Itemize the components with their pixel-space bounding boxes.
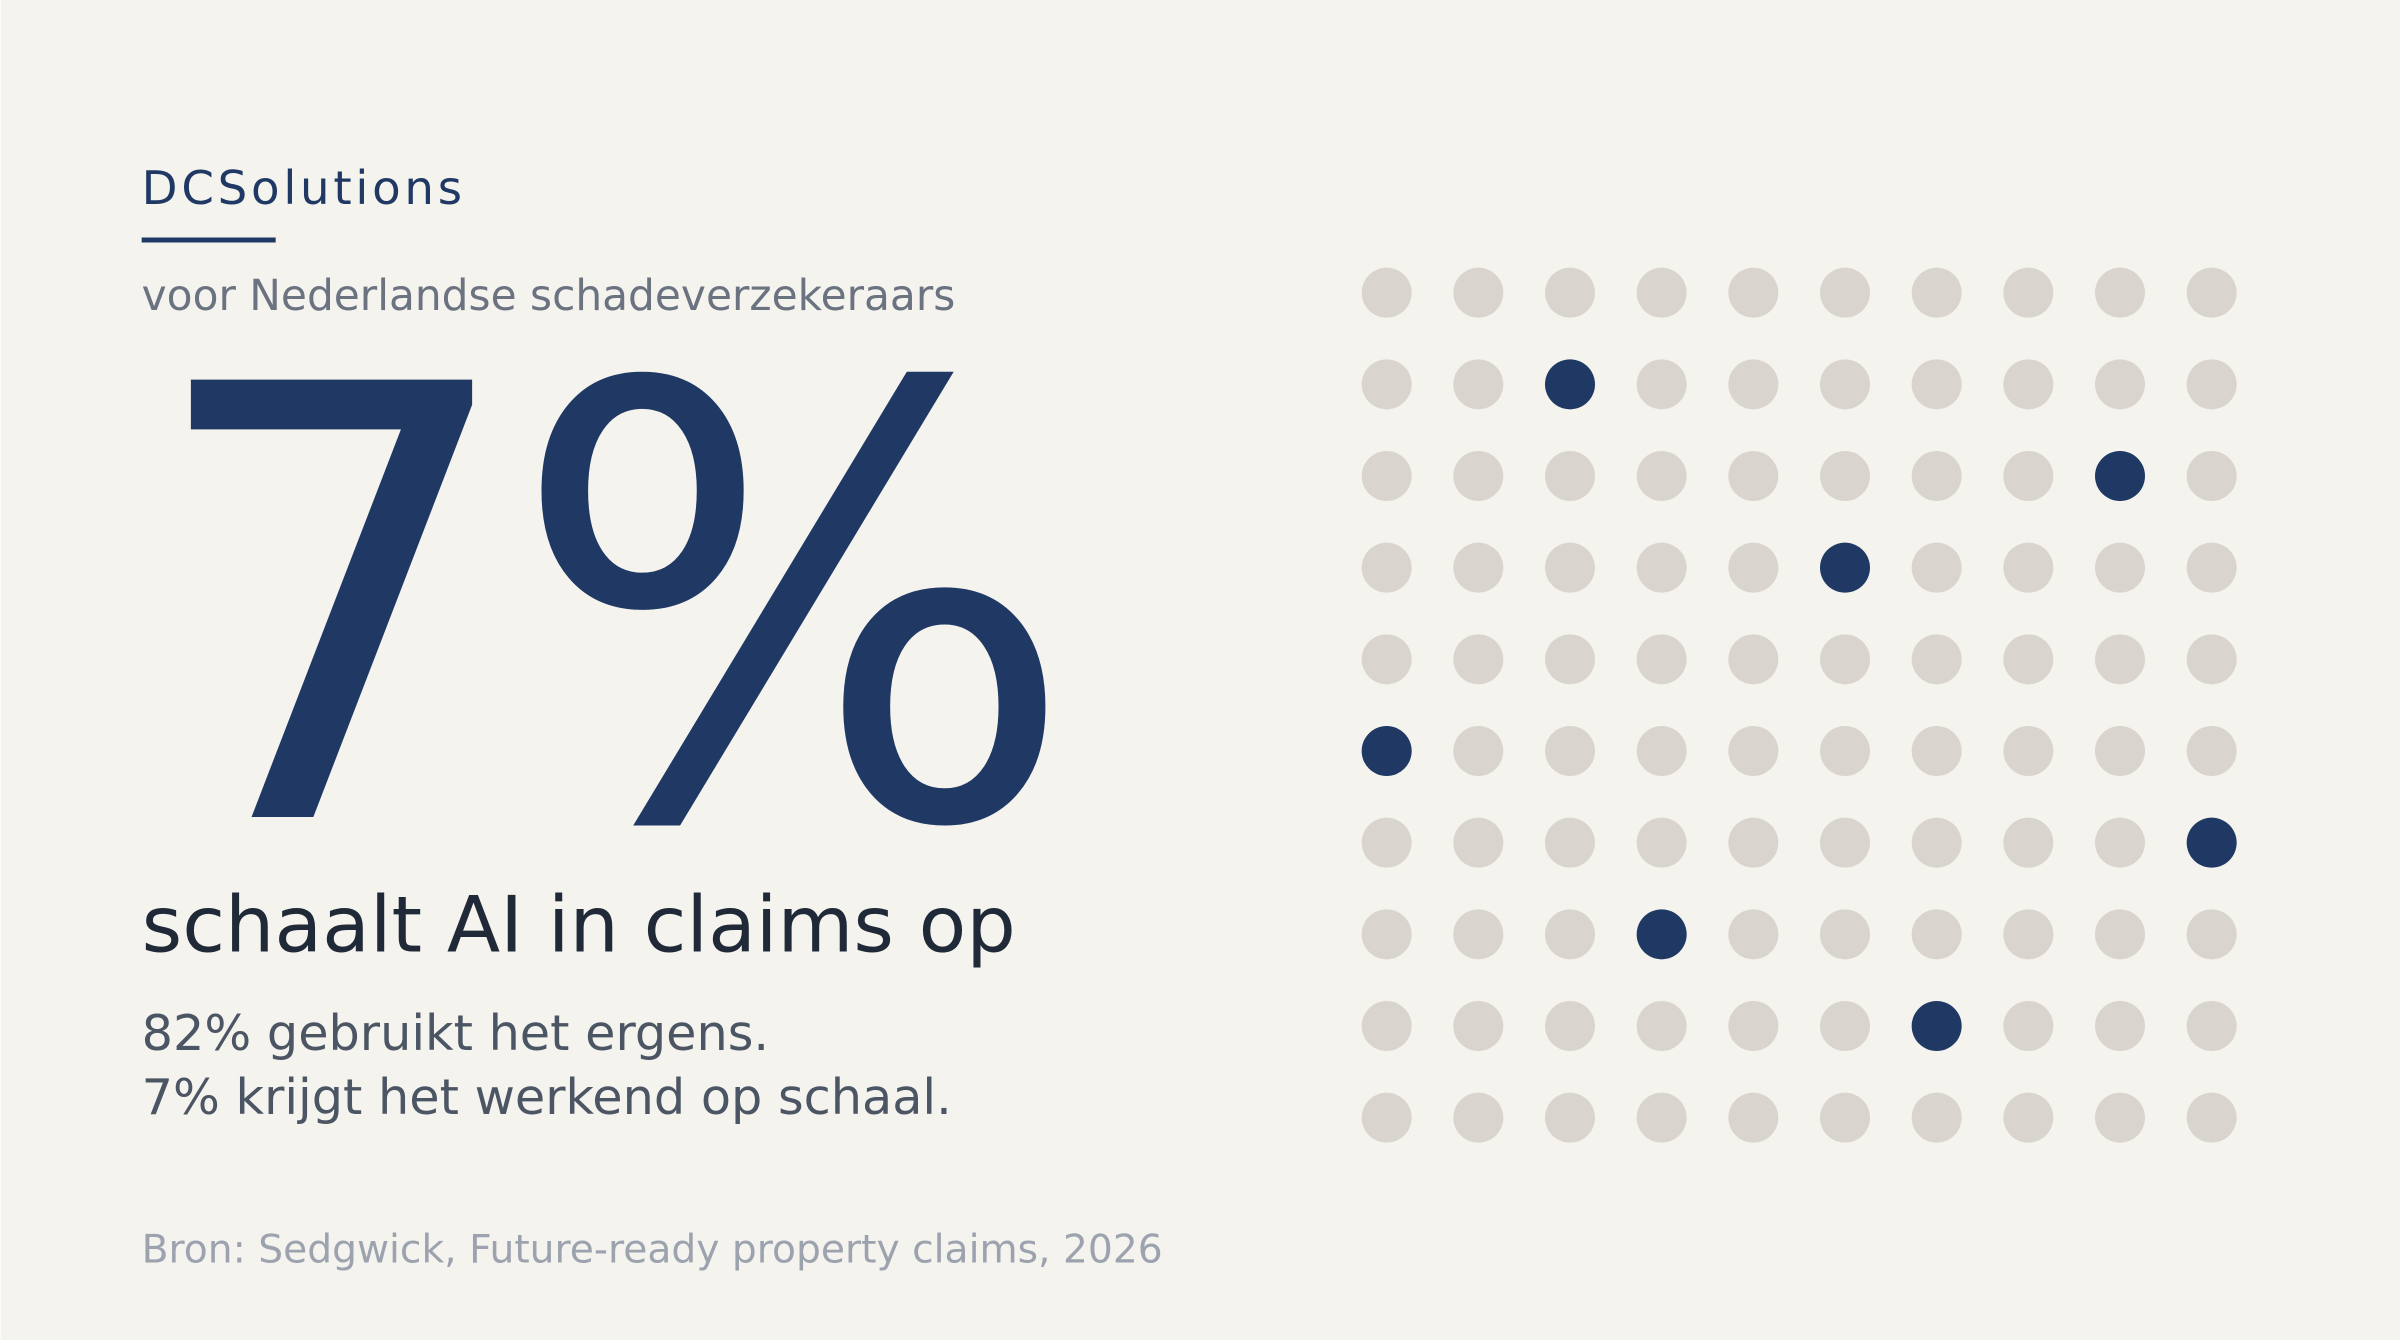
body text (142, 1004, 952, 1126)
body text: 82% gebruikt het ergens. (142, 1004, 769, 1062)
body text: 7% krijgt het werkend op schaal. (142, 1068, 952, 1126)
dot grid: 7 of 100 highlighted (1362, 268, 2237, 1143)
headline: schaalt AI in claims op (142, 880, 1016, 970)
subtitle: voor Nederlandse schadeverzekeraars (142, 271, 955, 320)
highlighted dots (1362, 359, 2237, 1051)
brand underline (142, 238, 276, 242)
brand name: DCSolutions (142, 162, 466, 216)
big number: 7% (142, 260, 1064, 959)
source note: Bron: Sedgwick, Future-ready property claims, 2026 (142, 1228, 1163, 1272)
